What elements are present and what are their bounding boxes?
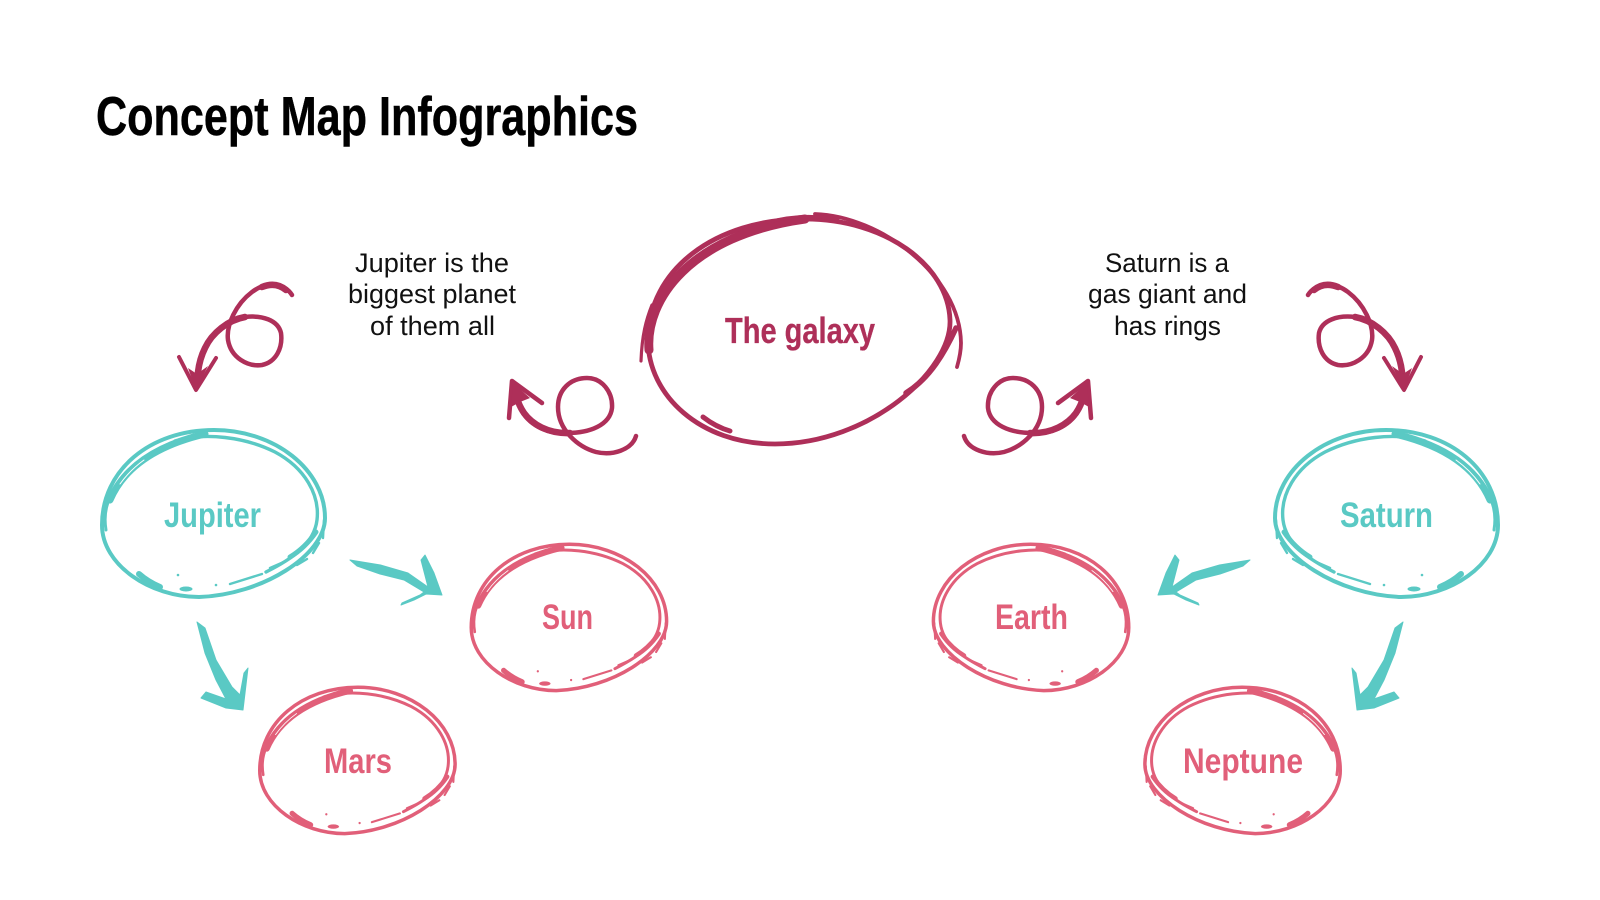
arrow: curly to Jupiter (179, 285, 292, 390)
node: Neptune (1145, 687, 1340, 834)
node: Earth: Earth (995, 598, 1068, 637)
text: Saturn description (1088, 248, 1247, 341)
node: Jupiter: Jupiter (164, 496, 261, 535)
node: Sun (471, 544, 667, 691)
node: Jupiter (102, 430, 325, 597)
arrow: Saturn to Earth (1158, 555, 1250, 605)
title: Concept Map Infographics (96, 85, 638, 147)
text: Saturn description: Saturn is a (1105, 248, 1230, 278)
arrow: curly from galaxy left (509, 378, 636, 453)
arrow: Jupiter to Mars (197, 622, 248, 710)
label: The galaxy: The galaxy (725, 310, 875, 351)
node: Earth (933, 544, 1129, 691)
arrow: Saturn to Neptune (1352, 622, 1403, 710)
text: Saturn description: has rings (1114, 311, 1221, 341)
text: Jupiter description: biggest planet (348, 279, 516, 309)
node: Saturn: Saturn (1340, 496, 1433, 535)
arrow: curly from galaxy right (964, 378, 1091, 453)
text: Jupiter description (348, 248, 516, 341)
node: Mars (260, 687, 455, 834)
arrow: curly to Saturn (1308, 285, 1421, 390)
text: Jupiter description: Jupiter is the (355, 248, 509, 278)
node: Neptune: Neptune (1183, 742, 1303, 781)
node: Mars: Mars (324, 742, 392, 781)
node: Sun: Sun (542, 598, 593, 637)
arrow: Jupiter to Sun (350, 555, 442, 605)
node: The galaxy (641, 214, 961, 444)
text: Saturn description: gas giant and (1088, 279, 1247, 309)
text: Jupiter description: of them all (370, 311, 495, 341)
node: Saturn (1275, 430, 1498, 597)
